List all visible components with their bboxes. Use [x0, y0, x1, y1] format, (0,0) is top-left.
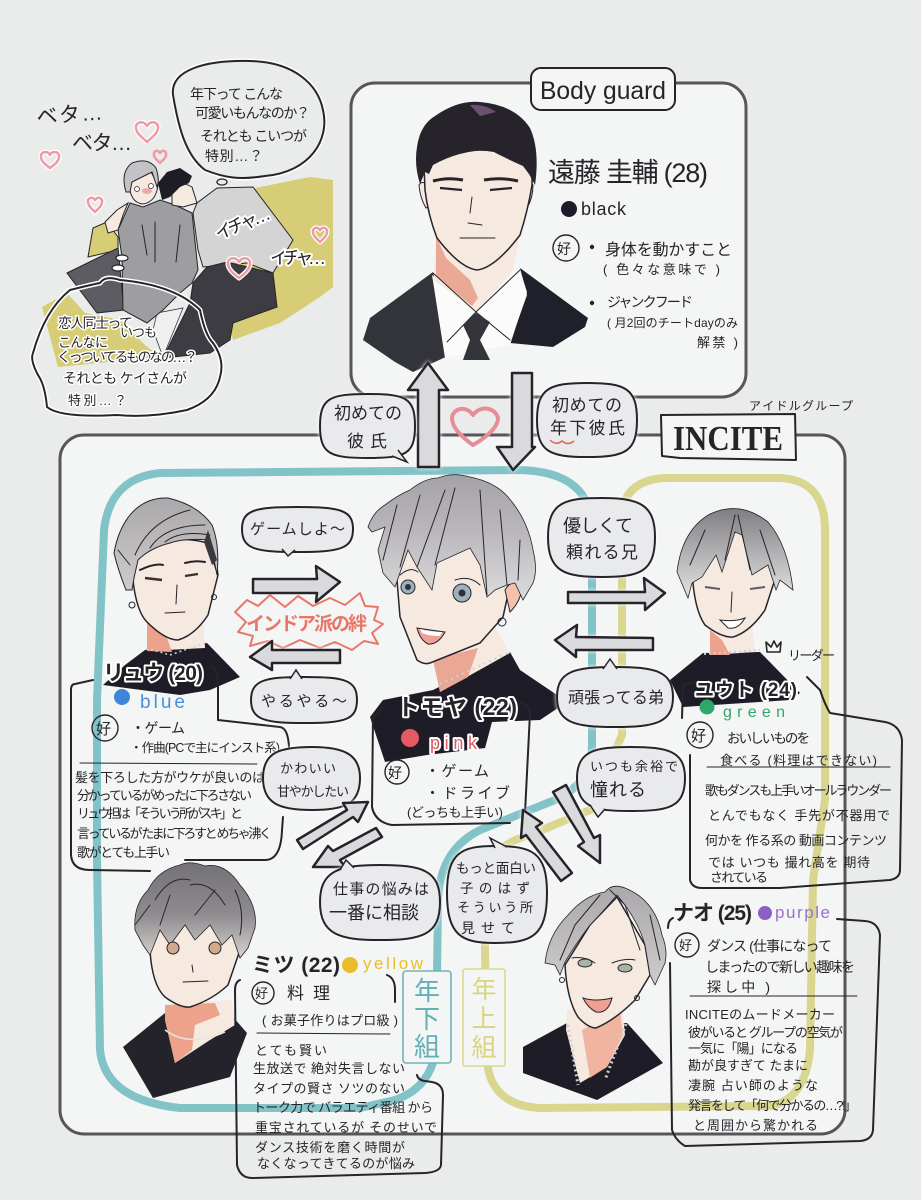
bubble: hardworking little brother: [557, 659, 673, 727]
thought bubble: Tomoya: 特別…？: [68, 393, 127, 408]
likes: Yuuto: おいしいものを: [727, 731, 810, 746]
likes: Nao: ダンス (仕事になって: [707, 938, 832, 954]
bubble: first younger boyfriend: 初めての: [552, 396, 622, 415]
card: Yuuto: [682, 677, 902, 888]
likes: Ryu: ・ゲーム: [131, 720, 185, 736]
text: Ryu profile: 歌がとても上手い: [77, 845, 170, 860]
thought bubble: Tomoya: [32, 255, 221, 416]
thought bubble: Keisuke: それとも こいつが: [200, 128, 307, 144]
text: Nao profile: [685, 1007, 857, 1133]
text: イチャ: イチャ…: [270, 248, 326, 268]
likes: Keisuke: 身体を動かすこと: [605, 241, 732, 259]
bubble: first boyfriend: 彼氏: [347, 432, 387, 451]
label: leader with crown: [766, 641, 835, 663]
portrait: Endo Keisuke: [363, 102, 588, 372]
bubble: more interesting: もっと面白い: [456, 861, 536, 876]
text: Mitsu profile: [253, 1043, 437, 1171]
color tag: green: [700, 700, 785, 721]
bubble: cute want to spoil: かわいい: [280, 761, 336, 776]
text: Nao profile: 発言をして「何で分かるの…?!」: [688, 1098, 857, 1113]
text: Ryu profile: [75, 770, 272, 860]
arrow: Yuuto to Tomoya: [555, 625, 653, 657]
heading: Body guard: [531, 68, 675, 110]
bubble: consult first: [320, 860, 440, 940]
callout: indoor bond: [235, 593, 383, 650]
likes: Keisuke: ( 月2回のチートdayのみ: [607, 316, 738, 330]
thought bubble: Tomoya: こんなに: [58, 335, 108, 350]
likes: Yuuto: 食べる (料理はできない): [720, 753, 877, 768]
likes: Keisuke: 解禁 ): [697, 335, 738, 350]
color tag: yellow: yellow: [363, 954, 424, 973]
card: Ryu: [71, 662, 289, 871]
text: Yuuto profile: されている: [710, 870, 768, 885]
likes: Mitsu: ( お菓子作りはプロ級 ): [262, 1013, 398, 1028]
thought bubble: Keisuke: 特別…？: [205, 148, 263, 164]
text: Mitsu profile: トーク力で バラエティ番組 から: [253, 1100, 433, 1115]
label: younger group: 年: [414, 976, 440, 1006]
text: Ryu profile: 言っているが たまに下ろすと めちゃ沸く: [77, 826, 272, 841]
label: older group: 上: [471, 1005, 497, 1033]
likes: Tomoya: ・ドライブ: [425, 784, 510, 802]
card: Tomoya: [372, 694, 530, 825]
bubble: kind reliable brother: 頼れる兄: [566, 543, 638, 562]
likes: Mitsu: [252, 982, 398, 1028]
portrait: Tomoya: [368, 475, 570, 762]
text: Ryu profile: 髪を下ろした方がウケが良いのは: [75, 770, 265, 785]
thought bubble: Keisuke: [173, 61, 324, 185]
likes: Tomoya: ・ゲーム: [425, 763, 489, 780]
color tag: blue: [114, 689, 185, 713]
arrow: Mitsu to Tomoya: [297, 802, 368, 849]
likes: Yuuto: 好: [691, 728, 706, 745]
arrow: Tomoya to Ryu: [250, 641, 340, 670]
text: Mitsu profile: 重宝されているが そのせいで: [255, 1120, 437, 1135]
likes: Ryu: ・作曲(PCで主にインスト系): [130, 741, 280, 755]
callout: indoor bond: インドア派の絆: [246, 613, 367, 635]
illustration: couple on sofa: [36, 101, 333, 367]
bubble: first younger boyfriend: [537, 383, 637, 457]
label: older group: 年: [471, 976, 497, 1004]
bubble: let's play a game: [242, 507, 353, 556]
likes: Ryu: 好: [96, 721, 111, 738]
portrait: Mitsu: [123, 863, 255, 1098]
likes: Ryu: [92, 715, 280, 755]
name: Yuuto: ユウト (24): [695, 679, 797, 701]
text: イチャ: イチャ…: [212, 203, 273, 244]
arrow: Tomoya to Yuuto: [568, 578, 665, 610]
bubble: let's play a game: ゲームしよ〜: [250, 521, 345, 538]
text: Nao profile: 彼がいると グループの空気が: [688, 1025, 843, 1040]
text: Nao profile: 凄腕 占い師のような: [688, 1078, 818, 1093]
bubble: always composed: [577, 747, 685, 817]
bubble: more interesting: 見せて: [461, 920, 515, 936]
bubble: consult first: 仕事の悩みは: [333, 881, 429, 898]
label: older group: [463, 969, 505, 1066]
text: ベタ: [36, 101, 132, 155]
likes: Nao: [675, 933, 855, 995]
bubble: sure sure: [251, 670, 357, 723]
text: Yuuto profile: 歌もダンスも上手いオールラウンダー: [705, 783, 892, 798]
thought bubble: Tomoya: くっついてるものなの…？: [57, 349, 198, 365]
text: ベタ: ベタ…: [72, 132, 132, 155]
bubble: hardworking little brother: 頑張ってる弟: [568, 689, 664, 707]
likes: Tomoya: (どっちも上手い): [407, 805, 503, 820]
label: younger group: [403, 971, 451, 1063]
label: younger group: 下: [414, 1004, 440, 1034]
text: Yuuto profile: [705, 783, 892, 885]
label: older group: 組: [471, 1034, 497, 1062]
likes: Nao: しまったので新しい趣味を: [705, 959, 855, 975]
bubble: kind reliable brother: 優しくて: [563, 516, 633, 536]
text: Mitsu profile: 生放送で 絶対失言しない: [253, 1061, 405, 1076]
likes: Keisuke: [553, 235, 738, 350]
bubble: first younger boyfriend: 年下彼氏: [550, 419, 625, 438]
color tag: blue: blue: [140, 692, 185, 713]
arrow: Tomoya to Mitsu: [313, 828, 382, 867]
bubble: always composed: 憧れる: [590, 780, 646, 800]
text: Mitsu profile: なくなってきてるのが悩み: [257, 1156, 415, 1171]
icon: heart: [452, 409, 498, 445]
text: Ryu profile: リュウ担は「そういう所がスキ」と: [77, 806, 243, 821]
label: younger group: 組: [414, 1032, 440, 1062]
card: Nao: [668, 902, 880, 1146]
bubble: more interesting: そういう所: [457, 900, 533, 915]
likes: Tomoya: 好: [388, 765, 402, 781]
text: Ryu profile: 分かっているがめったに下ろさない: [77, 788, 252, 803]
label: leader with crown: リーダー: [788, 648, 835, 663]
arrow: down: [497, 373, 535, 470]
portrait: Nao: [523, 886, 666, 1100]
text: イチャ: [212, 203, 326, 268]
name: Mitsu: ミツ (22): [252, 954, 340, 977]
panel: body guard: [351, 68, 746, 397]
hearts: [41, 122, 327, 278]
text: Mitsu profile: タイプの賢さ ソツのない: [253, 1081, 405, 1096]
thought bubble: Tomoya: いつも: [120, 325, 157, 340]
thought bubble: Tomoya: それとも ケイさんが: [63, 370, 187, 386]
line: younger group (teal): [97, 470, 592, 1108]
thought bubble: Keisuke: 可愛いもんなのか？: [195, 105, 310, 121]
arrow: Ryu to Tomoya: [253, 566, 340, 602]
bubble: more interesting: 子のはず: [460, 881, 530, 896]
name: 遠藤 圭輔: 遠藤 圭輔 (28): [548, 158, 708, 188]
bubble: sure sure: やるやる〜: [261, 693, 347, 710]
bubble: first boyfriend: 初めての: [334, 404, 402, 423]
text: ベタ: ベタ…: [36, 101, 103, 129]
bubble: consult first: 一番に相談: [329, 903, 419, 923]
arrow: Nao to Tomoya: [521, 810, 572, 881]
bubble: more interesting: [447, 838, 547, 943]
text: Yuuto profile: では いつも 撮れ高を 期待: [708, 855, 870, 870]
likes: Mitsu: 好: [255, 986, 268, 1001]
color tag: green: green: [723, 704, 785, 721]
bubble: cute want to spoil: [263, 747, 360, 810]
text: Yuuto profile: 何かを 作る系の 動画コンテンツ: [705, 833, 887, 848]
arrow: up: [408, 363, 448, 467]
likes: Keisuke: ジャンクフード: [607, 294, 693, 310]
label: idol group: アイドルグループ: [749, 399, 853, 413]
text: Mitsu profile: ダンス技術を磨く時間が: [255, 1140, 405, 1155]
text: Yuuto profile: とんでもなく 手先が不器用で: [708, 808, 890, 823]
text: Nao profile: と周囲から驚かれる: [693, 1118, 818, 1133]
color tag: pink: [401, 729, 478, 753]
heading: Body guard: Body guard: [540, 77, 666, 105]
likes: Yuuto: [687, 722, 877, 768]
color tag: purple: purple: [775, 903, 830, 922]
bubble: cute want to spoil: 甘やかしたい: [277, 784, 349, 799]
portrait: Yuuto: [670, 509, 800, 707]
line: older group (olive): [485, 478, 825, 1108]
panel: INCITE group: [60, 399, 853, 1134]
text: Nao profile: INCITEのムードメーカー: [685, 1007, 835, 1022]
portrait: Ryu: [103, 498, 240, 695]
card: Mitsu: [235, 954, 443, 1178]
thought bubble: Tomoya: 恋人同士って: [58, 315, 133, 331]
bubble: first boyfriend: [320, 394, 415, 462]
name: Tomoya: トモヤ (22): [397, 694, 517, 720]
likes: Keisuke: 好: [557, 241, 571, 257]
likes: Nao: 探し中 ): [707, 979, 770, 995]
bubble: always composed: いつも余裕で: [590, 759, 678, 774]
text: Nao profile: 勘が良すぎて たまに: [688, 1058, 808, 1073]
text: Nao profile: 一気に「陽」になる: [688, 1041, 798, 1056]
text: Mitsu profile: とても賢い: [255, 1043, 327, 1058]
thought bubble: Keisuke: 年下って こんな: [190, 86, 283, 102]
name: Nao: ナオ (25): [673, 902, 752, 925]
heading: INCITE: INCITE: [673, 419, 783, 458]
color tag: pink: pink: [430, 733, 478, 753]
likes: Mitsu: 料理: [287, 984, 330, 1003]
name: Ryu: リュウ (20): [103, 662, 203, 685]
likes: Nao: 好: [679, 938, 692, 953]
bubble: kind reliable brother: [548, 498, 655, 577]
arrow: Tomoya to Nao: [553, 785, 600, 863]
likes: Keisuke: ( 色々な意味で ): [603, 262, 720, 277]
color tag: black: black: [581, 199, 627, 219]
color tag: black: [561, 199, 627, 219]
likes: Tomoya: [385, 760, 510, 820]
